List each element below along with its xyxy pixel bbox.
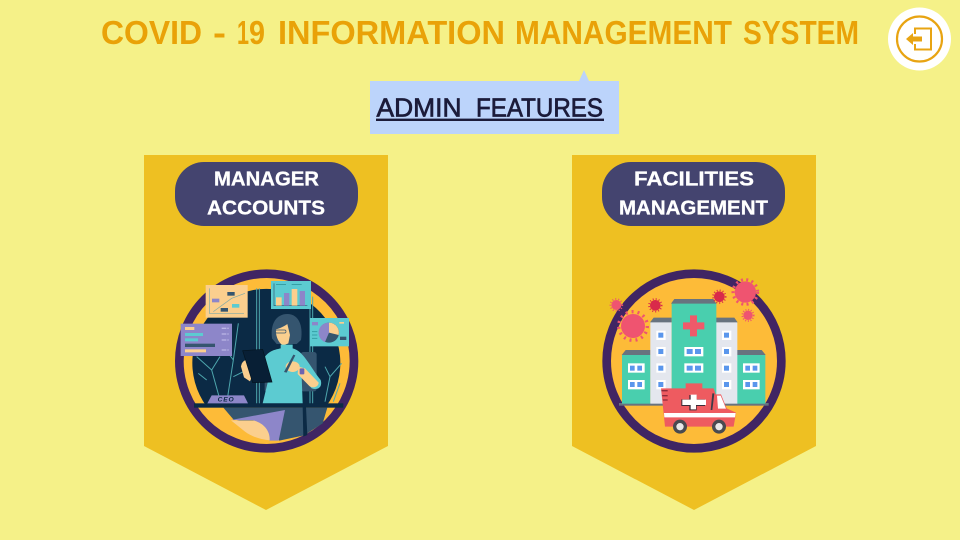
sweater [263, 345, 321, 403]
banner shape [144, 155, 388, 510]
heading pill: facilities management: FACILITIES [634, 168, 754, 190]
watch [300, 368, 304, 374]
panel: facilities management [572, 155, 816, 510]
CEO nameplate [207, 395, 248, 404]
heading pill: facilities management: MANAGEMENT [619, 198, 768, 220]
illustration: manager at desk [179, 274, 354, 448]
title: - [213, 14, 226, 51]
pie chart panel [310, 318, 349, 346]
callout: admin features: FEATURES [476, 93, 603, 123]
bar chart panel [271, 281, 311, 309]
panel: manager accounts [144, 155, 388, 510]
heading pill: manager accounts [175, 162, 358, 226]
title: COVID [101, 14, 202, 51]
face [276, 324, 290, 345]
heading pill: manager accounts: MANAGER [214, 168, 320, 190]
flow chart panel [206, 285, 248, 318]
title: 1 [237, 14, 249, 51]
heading pill: facilities management [602, 162, 785, 226]
forearm [298, 367, 319, 387]
title: 9 [249, 14, 265, 51]
bars list panel [181, 324, 232, 356]
background lines and plants [197, 288, 342, 403]
red cross [683, 315, 704, 336]
title: SYSTEM [743, 14, 859, 51]
windows [628, 331, 760, 389]
desk [194, 403, 343, 408]
heading pill: manager accounts: ACCOUNTS [207, 198, 325, 220]
banner shape [572, 155, 816, 510]
right hand and pen [286, 361, 300, 372]
viruses [610, 280, 758, 340]
person [241, 314, 321, 403]
icon: back / exit button [888, 8, 951, 70]
callout: admin features [370, 70, 619, 134]
tablet [243, 349, 272, 383]
title: MANAGEMENT [515, 14, 732, 51]
hair [272, 314, 302, 344]
hospital [619, 299, 769, 406]
title: INFORMATION [278, 14, 505, 51]
CEO nameplate: CEO [218, 397, 234, 404]
lower desk area [223, 408, 327, 441]
callout: admin features: ADMIN [376, 93, 462, 123]
chair [301, 352, 317, 391]
left hand [241, 360, 253, 381]
ambulance [661, 383, 736, 434]
title [101, 14, 859, 51]
illustration: hospital, ambulance and viruses [607, 274, 781, 448]
